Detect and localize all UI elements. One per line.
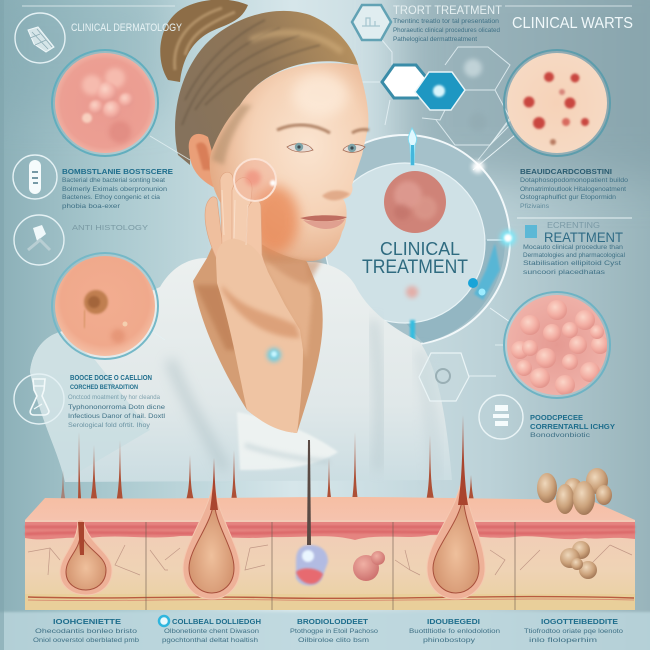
hexagon: faint lesion lower (469, 113, 487, 131)
icon: flask (14, 374, 64, 424)
text block: right one: Pfizivains (520, 204, 549, 210)
title: clinical treatment (362, 239, 468, 278)
text block: left two: BOOCE DOCE O CAELLION (70, 375, 152, 382)
bottom caption 4: Buottltiotle fo enlodolotion (409, 628, 500, 635)
top surface (25, 497, 635, 520)
hair shade at temple (212, 105, 252, 165)
fat band (25, 594, 635, 610)
heading: clinical warts: CLINICAL WARTS (512, 15, 633, 32)
bottom caption 1: Oniol ooverstol oberblated pmb (33, 637, 139, 644)
bottom caption 4: phinobostopy (423, 637, 476, 644)
connector lines (150, 120, 510, 345)
bathrobe (30, 258, 452, 482)
icon: top left device (15, 13, 65, 63)
text block: right bottom: Bonodvonbiotic (530, 433, 590, 439)
text block: right bottom: POODCPECEE (530, 415, 583, 422)
lips (300, 215, 347, 229)
hexagon cluster (350, 5, 510, 145)
outer ring (300, 135, 510, 345)
eyes (287, 143, 365, 152)
skin cross-section (25, 415, 635, 610)
text block: left two: Infectious Danor of hail. Doxtl (68, 414, 165, 420)
text block: left one: Bactenes. Ethoy congenic et cia (62, 195, 161, 201)
text block: left two: Typhononorroma Dotn dicne (68, 405, 166, 411)
hexagon: faint lesion top (464, 59, 482, 77)
text block: left one: BOMBSTLANIE BOSTSCERE (62, 169, 173, 176)
icon: stack (479, 395, 523, 439)
text block: left two: Serological fold ofrtit. Ihoy (68, 423, 150, 429)
text block: left one: phobia boa-exer (62, 204, 120, 210)
heading: anti histology: ANTI HISTOLOGY (72, 225, 148, 232)
follicle 2 (183, 458, 240, 599)
lens circle (234, 159, 276, 201)
hand (205, 172, 303, 433)
small lesion (406, 286, 418, 298)
text block: right one: Ostographulfict gur Etopormidn (520, 195, 616, 201)
bottom caption 1 (33, 619, 139, 644)
follicle 3 glowing (296, 440, 328, 586)
text block: left one (62, 169, 173, 210)
cheek flush (251, 186, 299, 254)
divider line (517, 217, 632, 219)
text block: right bottom (530, 415, 615, 439)
hexagon: lower right (419, 353, 496, 401)
bottom caption 5 (524, 619, 623, 644)
wrist glow (267, 348, 281, 362)
hair (175, 11, 358, 165)
text block: top hexagon: Thentinc treatlo tor tal presentation (393, 19, 499, 25)
hair bun (160, 0, 248, 82)
bottom caption 2: Olbonetionte chent Diwason (164, 628, 259, 635)
bottom caption 5: inlo floloperhim (529, 637, 597, 644)
woman (30, 0, 452, 482)
red epidermis layer (25, 522, 635, 540)
lesion circle: red spots (504, 50, 610, 156)
icon: capsule (13, 155, 57, 199)
neck and chest (193, 235, 323, 433)
under chin shadow (262, 246, 322, 285)
icon: blue square (525, 225, 537, 238)
ear (189, 134, 220, 188)
section dividers (146, 522, 515, 610)
lesion circle: cluster (504, 292, 610, 398)
text block: right treatment (523, 221, 625, 276)
text block: right treatment: Dermatologies and pharmacological (523, 253, 625, 259)
front face (25, 520, 635, 610)
text block: right one: Dotaphosopodomonopatient buildo (520, 178, 629, 184)
text block: left two: CORCHED BETRADITION (70, 385, 138, 391)
right side ring graphic (300, 128, 516, 345)
follicle 5 (427, 415, 485, 599)
text block: right one: BEAUIDCARDCOBSTINI (520, 169, 612, 176)
bottom caption 3 (290, 619, 378, 644)
cluster in dermis (560, 541, 597, 579)
follicle 1 (60, 520, 112, 595)
hexagon: white (382, 65, 430, 98)
follicle 4 nodule (353, 551, 385, 581)
text block: left one: Bacterial dhe bacterial sonting beat (62, 178, 165, 184)
bottom caption 4: IDOUBEGEDI (427, 619, 480, 626)
hexagon: blue (415, 72, 465, 110)
text block: left one: Bolmerly Eximals oberpronunion (62, 187, 167, 193)
text block: right one: Ohmatrimloutlook Hitalogenoatment (520, 187, 626, 193)
text block: right treatment: Stabilisation ellipitoid Cyst (523, 261, 621, 267)
text block: right treatment: ECRENTING (547, 221, 600, 230)
bottom caption 3: Oilbiroloe clito bsm (298, 637, 369, 644)
title: clinical treatment: CLINICAL (380, 239, 460, 259)
bottom caption 1: IOOHCENIETTE (53, 619, 121, 626)
text block: right treatment: Mocauto clinical procedure than (523, 245, 623, 251)
glowing nodes (408, 128, 516, 342)
bottom caption 3: BRODIOLODDEET (297, 619, 369, 626)
text block: right bottom: CORRENTARLL ICHGY (530, 424, 615, 431)
bottom caption 5: IOGOTTEIBEDDITE (541, 619, 618, 626)
nodules on the surface (537, 468, 612, 515)
heading: trort treatment: TRORT TREATMENT (393, 3, 503, 17)
brows (277, 125, 369, 133)
text block: top hexagon (393, 19, 500, 43)
forehead highlight (292, 73, 348, 117)
neck highlight (262, 262, 312, 360)
bottom caption 5: Ttiofrodtoo oriate pqe loenoto (524, 628, 623, 635)
chest shadow (195, 285, 238, 350)
text block: right one (520, 169, 629, 210)
bottom caption 3: Ptothogpe in Etoil Pachoso (290, 628, 378, 635)
face (210, 63, 368, 261)
text block: left two: Onctcod moatment by hor cleanda (68, 395, 161, 401)
dermal cracks (28, 545, 632, 575)
bottom caption 1: Ohecodantis bonleo bristo (35, 628, 138, 635)
heading: clinical dermatology: CLINICAL DERMATOLOGY (71, 22, 183, 34)
text block: left two (68, 375, 166, 429)
bottom caption 2 (159, 616, 261, 644)
inner disc (325, 163, 485, 323)
text block: top hexagon: Phoraeutic clinical procedures olicated (393, 28, 500, 34)
hexagon: top (352, 5, 391, 40)
bottom caption 4 (409, 619, 500, 644)
wart in the ring (384, 171, 446, 233)
text block: top hexagon: Pathelogical dermattreatment (393, 37, 477, 43)
text block: right treatment: suncoori placedhatas (523, 270, 605, 276)
title: clinical treatment: TREATMENT (362, 257, 468, 278)
text block: right treatment: REATTMENT (544, 229, 623, 245)
nose shadow (322, 190, 350, 200)
lesion circle: brown lesion (52, 253, 158, 359)
icon: tube (14, 215, 64, 265)
hairs above the skin (60, 432, 476, 522)
bottom caption 2: COLLBEAL DOLLIEDGH (172, 619, 261, 626)
lesion circle: cauliflower wart (52, 50, 158, 156)
icon: caption dot (159, 616, 169, 626)
bottom caption 2: pgochtonthal deltat hoaltish (162, 637, 258, 644)
